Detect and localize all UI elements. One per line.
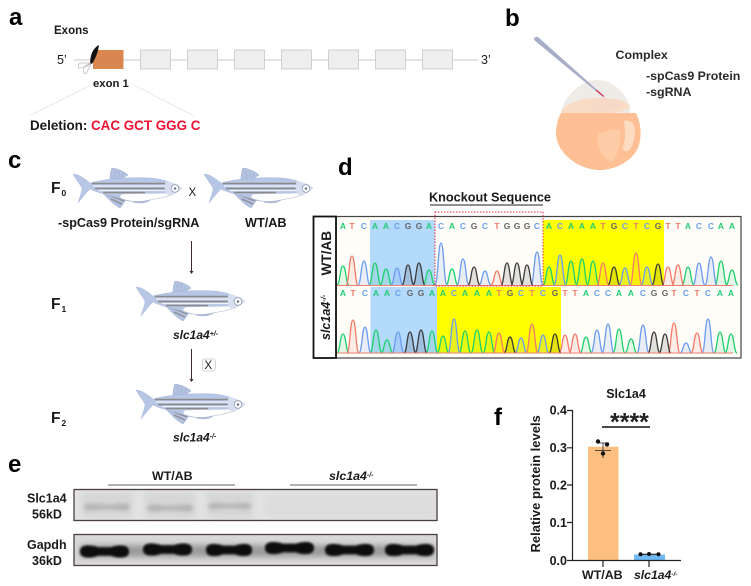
y tick labels: [550, 404, 567, 568]
knockout highlight box: [435, 212, 543, 286]
panel e: western blot: 56kD: [32, 508, 62, 522]
WT caption: WT/AB: [245, 216, 287, 230]
y tick labels: 0.4: [550, 404, 567, 418]
icon: embryo: [556, 80, 641, 170]
label c: c: [8, 147, 21, 174]
y tick labels: 0.2: [550, 478, 567, 492]
F1 label: 1: [61, 304, 66, 314]
complex heading: Complex: [616, 48, 668, 62]
zoom lines: [31, 85, 194, 116]
Gapdh labels: Gapdh: [27, 538, 67, 552]
F1 genotype: slc1a4: [173, 328, 210, 342]
y tick labels: 0.0: [550, 554, 567, 568]
panel b: microinjection: -sgRNA: [646, 85, 691, 99]
self cross symbol: X: [204, 360, 212, 372]
row 2 traces: [336, 319, 737, 353]
y tick labels: 0.3: [550, 441, 567, 455]
3 prime label: 3’: [481, 53, 491, 67]
label e: e: [8, 451, 21, 478]
grey exons: [140, 50, 452, 69]
row 1 base calls: AAAAAAAAAAAA: [340, 221, 735, 231]
F2 label: 2: [61, 418, 66, 428]
F1 label: F: [51, 296, 60, 313]
knockout group label: -/-: [367, 472, 374, 479]
fish F1: [136, 281, 245, 321]
F2 label: F: [51, 410, 60, 427]
icon: scissors: [78, 45, 99, 74]
5 prime label: 5’: [57, 53, 67, 67]
panel e: western blot: 36kD: [32, 554, 62, 568]
row 2 base calls: CCCCCCCCCC: [362, 288, 711, 298]
panel f: bar chart: [494, 387, 681, 582]
Slc1a4 blot: [74, 490, 437, 520]
F2 genotype: -/-: [210, 434, 217, 440]
deletion sequence: Deletion: CAC GCT GGG C: [30, 118, 201, 133]
fish F2: [136, 384, 245, 424]
panel b: microinjection: [505, 5, 740, 170]
exons heading: Exons: [54, 25, 89, 37]
panel f: bar chart: -/-: [671, 571, 677, 578]
arrow F1 to F2: [190, 349, 194, 382]
row 2 base calls: GGGGGG: [407, 288, 669, 298]
exon 1 label: exon 1: [93, 78, 129, 90]
panel e: western blot: [8, 451, 437, 568]
F0 label: F: [51, 180, 60, 197]
label b: b: [505, 5, 520, 32]
row 2 base calls: TTTTTTT: [350, 288, 700, 298]
complex components: -spCas9 Protein: [646, 69, 740, 83]
row 1 base calls: CCCCCCCCCCC: [361, 221, 714, 231]
x tick labels: WT/AB: [582, 568, 623, 582]
WT row label: WT/AB: [319, 231, 334, 276]
F2 genotype: slc1a4: [173, 430, 210, 444]
row 1 traces: [336, 243, 738, 286]
panel a: exon diagram: [9, 4, 491, 133]
bar WT: [588, 447, 618, 560]
cross symbol: X: [188, 187, 196, 199]
knockout data points: [638, 552, 660, 556]
Slc1a4 labels: Slc1a4: [27, 492, 67, 506]
arrow F0 to F1: [190, 241, 194, 274]
fish F0 wild type: [204, 168, 313, 208]
icon: needle: [534, 37, 604, 97]
fish F0 injected: [73, 168, 182, 208]
panel f: bar chart: slc1a4: [634, 568, 671, 582]
label f: f: [494, 404, 503, 431]
label a: a: [9, 4, 23, 31]
axes: [567, 410, 681, 567]
bar knockout: [634, 554, 665, 560]
injected fish caption: -spCas9 Protein/sgRNA: [58, 216, 199, 230]
row 2 base calls: AAAAAAAAAAAAA: [340, 288, 734, 298]
chromatogram frame: [336, 216, 741, 358]
knockout heading: Knockout Sequence: [429, 190, 551, 204]
WT group label: WT/AB: [152, 469, 193, 483]
row 1 base calls: TTTTTT: [349, 221, 681, 231]
row label box: [314, 216, 336, 358]
WT data points: [595, 439, 611, 458]
knockout group label: slc1a4: [329, 469, 367, 483]
panel d: sequencing chromatogram: [314, 154, 741, 358]
y axis label: Relative protein levels: [528, 415, 543, 552]
knockout row label: -/-: [319, 294, 328, 302]
row 1 base calls: GGGGGGGG: [405, 221, 662, 231]
panel c: breeding scheme: [8, 147, 313, 444]
label d: d: [338, 154, 353, 181]
gene line: [74, 59, 478, 61]
y tick labels: 0.1: [550, 516, 567, 530]
significance marker: ****: [610, 408, 649, 436]
Gapdh blot: [74, 534, 437, 566]
chart title: Slc1a4: [606, 387, 646, 401]
chromatogram background: [336, 217, 741, 358]
F1 genotype: +/-: [210, 331, 219, 338]
exon 1 block: [93, 50, 124, 69]
knockout row label: slc1a4: [319, 302, 333, 340]
F0 label: 0: [61, 188, 66, 198]
self cross symbol: [202, 359, 216, 372]
